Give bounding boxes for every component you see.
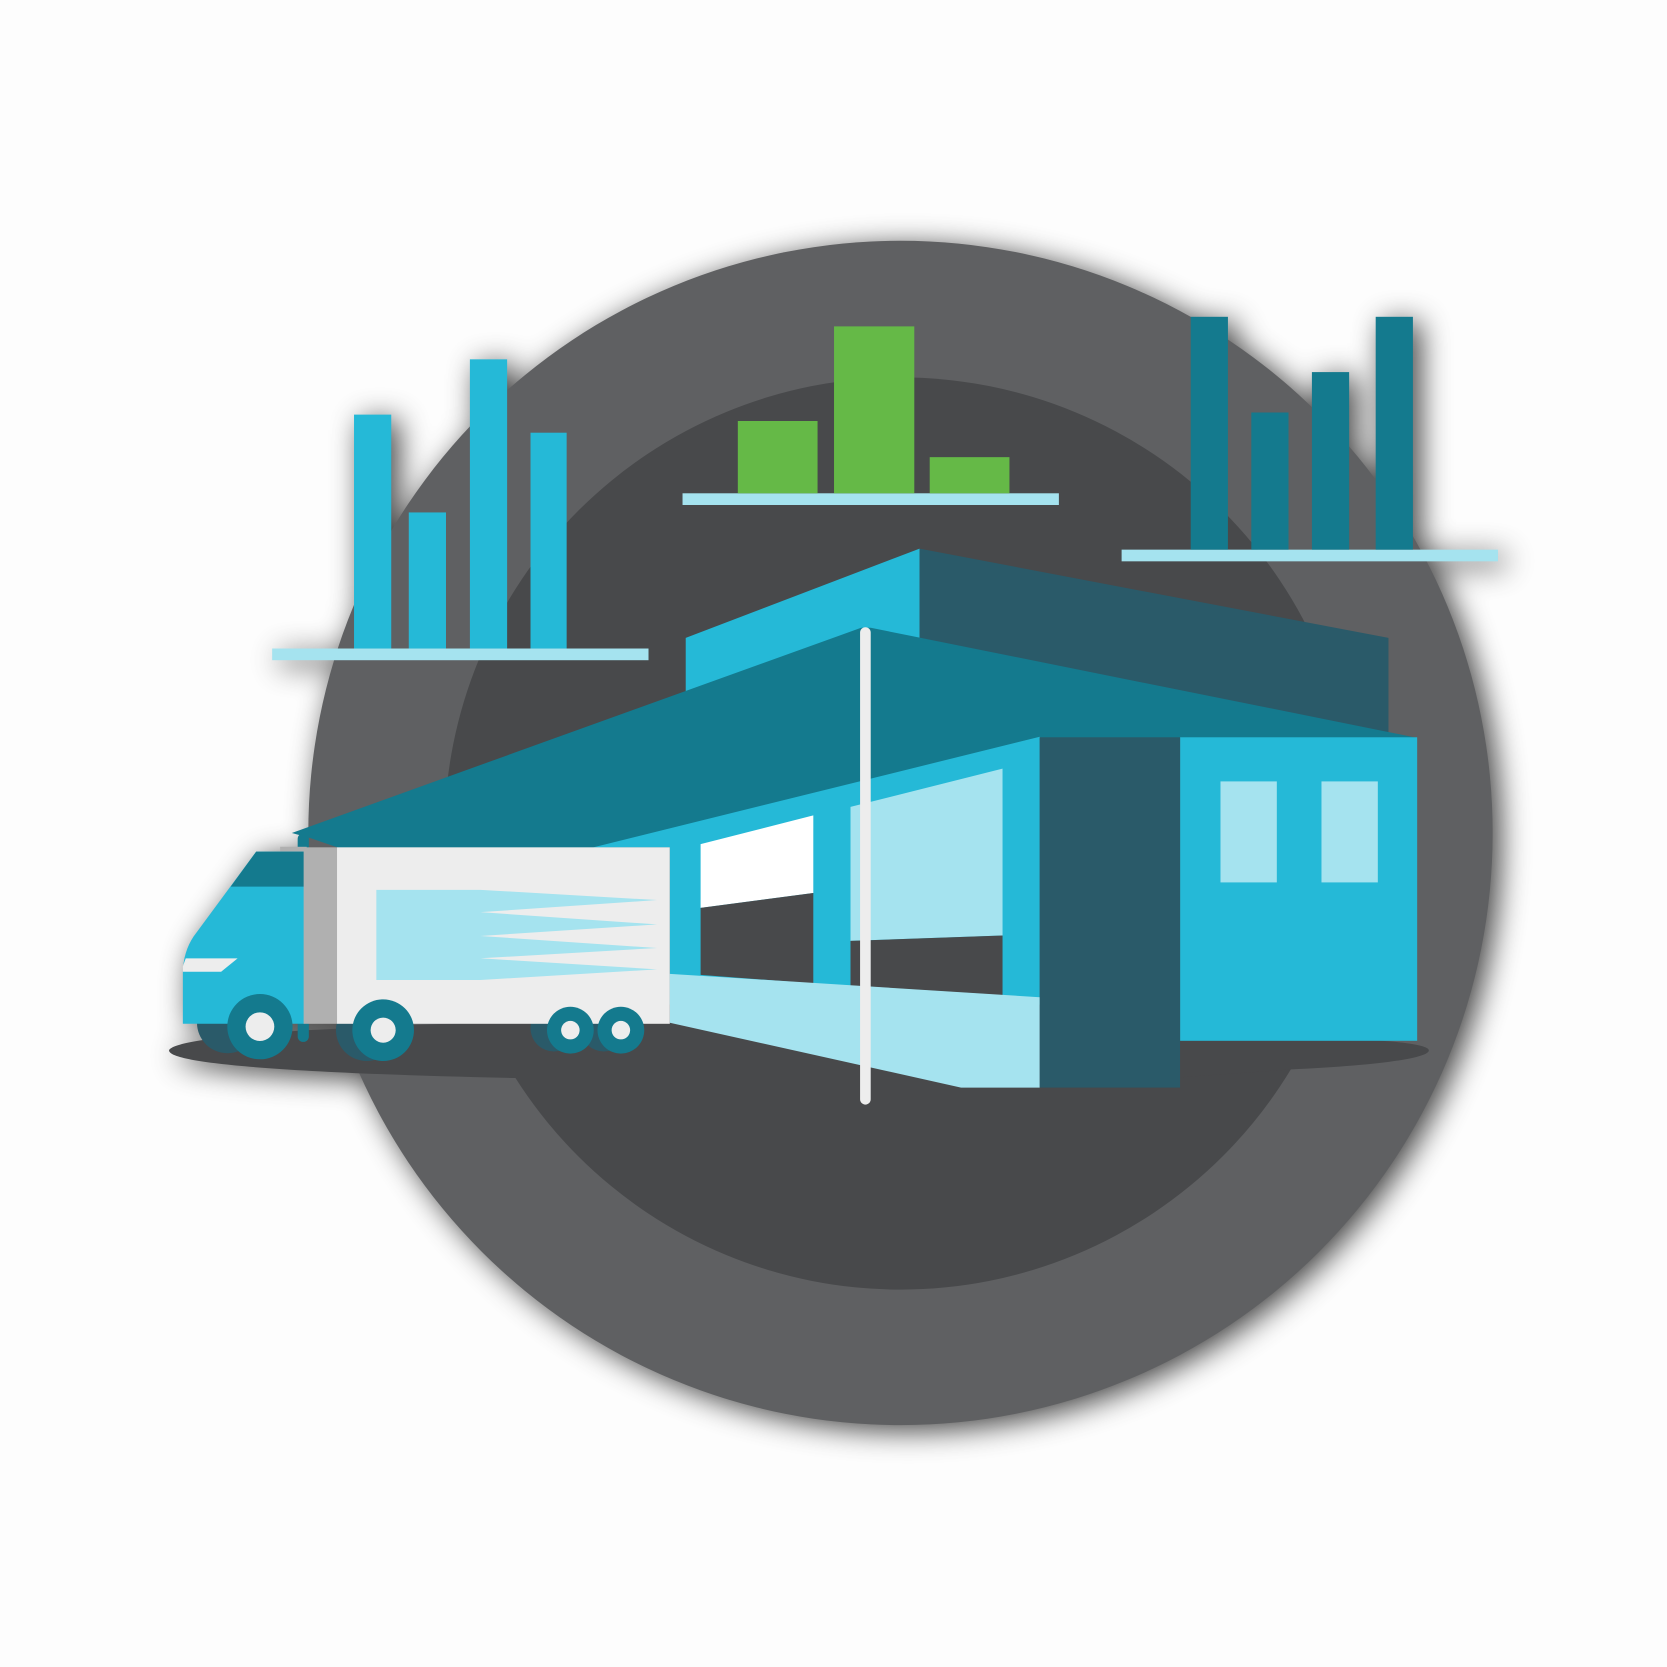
- office block: [1180, 737, 1417, 1041]
- white door: [701, 815, 813, 908]
- bars: right: [1191, 317, 1413, 550]
- cab window: [231, 852, 304, 887]
- bars: left: [354, 359, 567, 649]
- office window right: [1321, 781, 1378, 882]
- cab roof strip: [280, 847, 307, 853]
- inner circle: [444, 377, 1357, 1290]
- cab divider: [304, 847, 337, 1024]
- soft shadows behind the artwork: [176, 246, 1505, 1430]
- bar chart: middle green: [683, 326, 1059, 505]
- loading ramp: [670, 974, 1040, 1088]
- canopy support post: [298, 834, 309, 1042]
- rear wheel one: [547, 1007, 594, 1054]
- bar chart: right teal: [1122, 317, 1498, 561]
- loading bay wall: [593, 737, 1040, 1005]
- warehouse building: [292, 549, 1417, 1105]
- upper storey: cyan face: [686, 549, 920, 696]
- middle wheel: [352, 999, 414, 1061]
- truck body: [183, 847, 670, 1024]
- rear wheel two: [597, 1007, 644, 1054]
- cab: [183, 852, 304, 1024]
- truck: [183, 847, 670, 1061]
- cargo speed graphic: [376, 890, 657, 980]
- upper storey: dark face: [920, 549, 1388, 739]
- office window left: [1220, 781, 1277, 882]
- wheel shadows: [197, 992, 627, 1061]
- headlight stripe: [183, 958, 238, 972]
- dark door opening: [701, 893, 813, 983]
- shelf: left: [272, 649, 649, 660]
- shelf: middle: [683, 493, 1059, 505]
- roof canopy: [292, 628, 1417, 851]
- ground shadow: [169, 1023, 1429, 1078]
- cargo box: [337, 847, 670, 1024]
- dark window opening: [851, 936, 1003, 995]
- front wheel: [227, 994, 293, 1059]
- dark pillar: [1040, 737, 1180, 1088]
- bars: middle: [738, 326, 1009, 493]
- bar chart: left cyan: [272, 359, 649, 660]
- light window: [851, 769, 1003, 941]
- white pole: [860, 627, 871, 1105]
- shelf: right: [1122, 550, 1498, 561]
- outer circle: [308, 241, 1493, 1425]
